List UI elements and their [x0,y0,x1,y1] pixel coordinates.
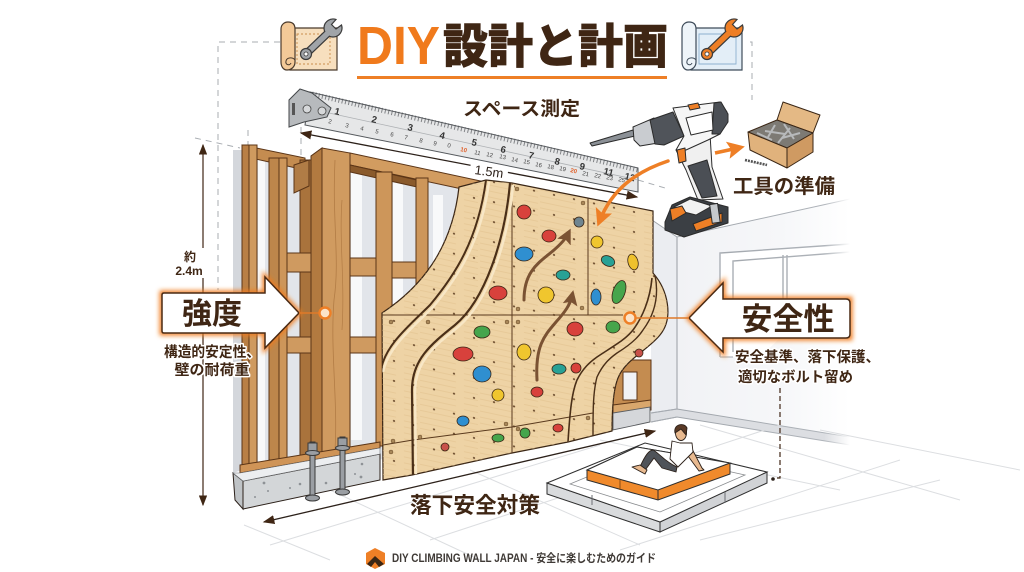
footer logo [366,548,385,569]
callout: strength: 強度 [182,289,242,333]
tape numbers: 13 [499,154,507,162]
height dimension arrow: 2.4m [175,264,203,278]
trigger [677,148,686,163]
tape numbers: 2 [328,119,333,126]
measuring tape [289,89,638,192]
room: wall, window and floor [244,199,1020,560]
icon: box of screws [745,102,820,168]
tape numbers: 11 [474,150,482,157]
crash mat and base [547,443,767,532]
callout: safety [624,283,880,387]
title: DIY [357,16,440,76]
tape numbers [328,106,636,185]
height dimension arrow [175,145,206,505]
frame openings [257,158,490,470]
heading: space measurement: スペース測定 [463,94,580,121]
curved plywood layers [383,182,513,480]
plywood climbing wall [381,180,668,480]
tape numbers: 6 [390,132,395,139]
tape numbers: 5 [470,137,479,149]
floor grid [244,425,1020,560]
metal bracket [294,160,309,193]
icon: cordless drill [590,102,728,237]
callout: safety: 安全性 [742,294,834,339]
tape numbers: 11 [602,166,615,179]
tape numbers: 8 [553,156,561,168]
tape numbers: 4 [438,130,447,142]
label: fall safety: 落下安全対策 [410,488,540,520]
tape numbers: 21 [582,171,590,179]
width dimension arrow 1.5m: 1.5m [474,162,504,181]
tape numbers: 25 [618,177,626,185]
floor dimension arrow [264,431,655,522]
tape numbers: 19 [559,166,567,174]
icon: blueprint with orange wrench [682,19,743,70]
route arrows [524,234,572,380]
tape numbers: 22 [594,173,602,181]
width dimension arrow 1.5m [301,133,637,197]
tape numbers: 16 [535,162,543,170]
person sitting on mat [632,425,704,474]
climbing holds [441,205,643,451]
callout: safety: 安全基準、落下保護、 [735,346,880,367]
motor housing [673,102,727,150]
footer text: DIY CLIMBING WALL JAPAN - 安全に楽しむためのガイド [392,551,656,565]
tape numbers: 15 [523,159,531,167]
tape end bracket [289,89,331,127]
baseboard [651,409,850,445]
concrete footing [233,407,650,509]
bottom plate [240,442,380,473]
dashed measurement guides [195,42,780,481]
tape numbers: 10 [460,147,468,155]
main post [311,148,350,458]
tape numbers: 12 [486,152,494,160]
callout: strength: 構造的安定性、 [164,341,260,362]
icon: blueprint with grey wrench [281,19,342,70]
tape numbers: 7 [527,150,535,162]
tape numbers: 6 [499,144,507,156]
label: tool preparation: 工具の準備 [733,170,835,199]
window [720,244,850,357]
tape numbers: 23 [606,175,614,183]
handle [676,134,723,200]
callout: strength [162,277,330,380]
panel seams [382,183,623,453]
tape numbers: 5 [375,129,380,136]
battery [665,197,728,237]
tape numbers: 3 [345,123,350,130]
tape numbers: 12 [623,171,636,184]
tape numbers: 2 [370,114,378,126]
tape numbers: 8 [419,138,424,145]
timber stud frame [233,145,651,473]
tape numbers: 4 [360,126,365,133]
tape numbers: 3 [406,122,414,134]
tape numbers: 14 [511,157,519,165]
drill bit [590,130,635,146]
tape numbers: 18 [547,164,555,172]
orange mat [587,447,730,500]
tape numbers: 1 [333,106,342,118]
plywood fixing bolts [389,187,590,454]
tape numbers: 9 [433,141,438,148]
orange arrow: drill to wall [600,161,668,220]
tape numbers: 0 [447,143,452,150]
chuck [633,118,658,146]
anchor bolts [306,437,350,501]
orange arrow: drill to box [715,148,738,153]
callout: strength: 壁の耐荷重 [174,359,250,380]
callout: safety: 適切なボルト留め [738,366,853,387]
title underline [357,76,667,79]
height dimension arrow: 約 [184,249,196,264]
title: 設計と計画 [443,8,668,77]
tape numbers: 7 [404,135,409,142]
tape numbers: 9 [578,161,586,173]
right frame remnant [613,360,651,418]
tape numbers: 20 [570,168,578,176]
